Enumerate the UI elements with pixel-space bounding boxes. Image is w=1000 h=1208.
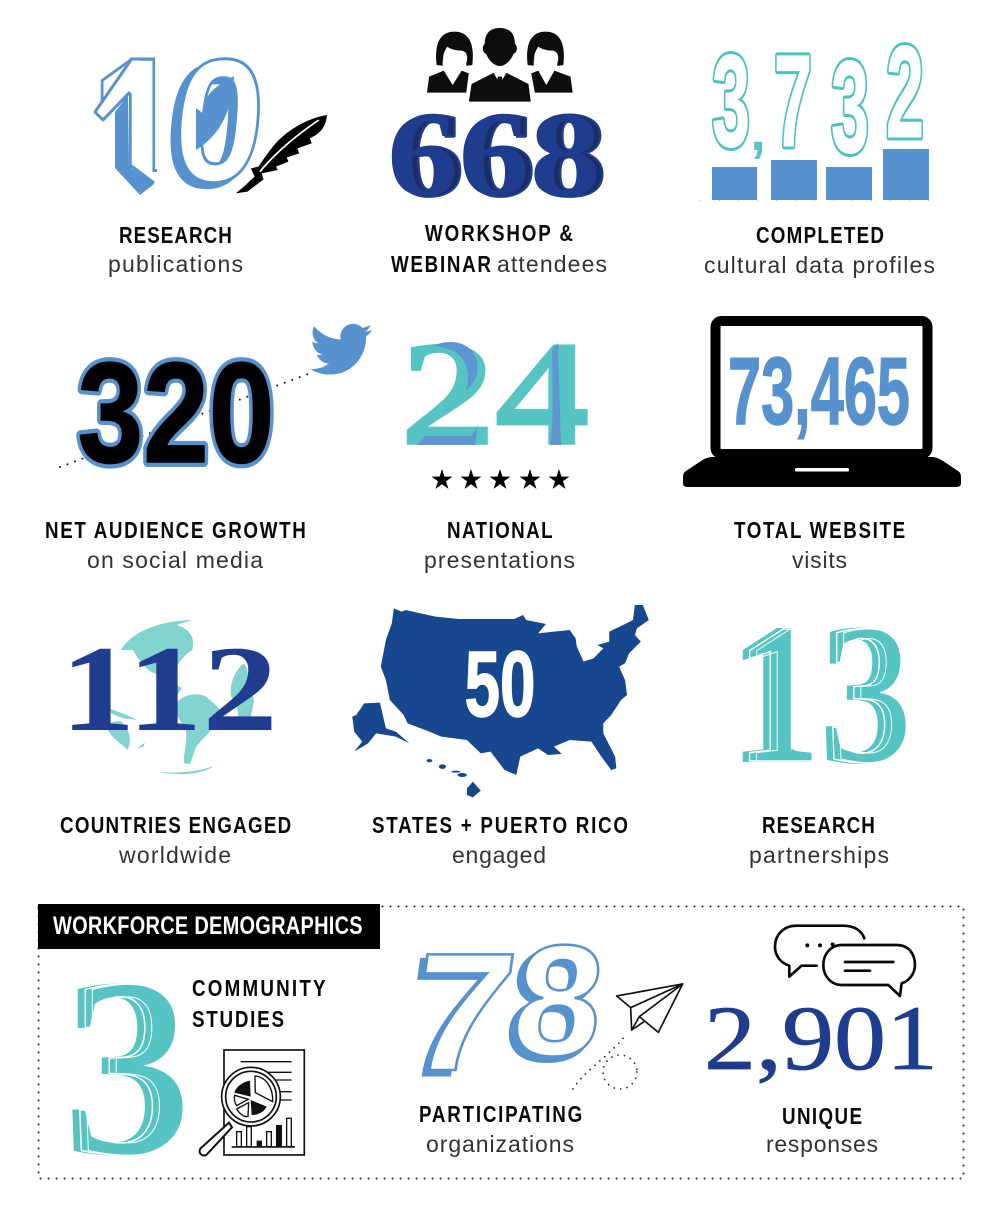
label [749,812,889,868]
number 2,901: 2,901 [704,988,938,1090]
digit one shadow [115,95,154,195]
number 3,732: 3 [712,28,750,175]
number 320: 320 [78,332,274,493]
digit one flag [95,59,155,183]
label [391,220,607,278]
label: organizations [426,1131,574,1157]
label: partnerships [749,842,889,868]
number 3,732: 3 [712,28,750,175]
stat: 78 participating organizations [392,912,683,1157]
label: COMMUNITY [192,975,326,1002]
label: UNIQUE [782,1103,862,1130]
number 3,732: 7 [774,28,812,175]
number 78: 7 [398,919,526,1106]
label [108,222,243,277]
number 3: 3 [70,927,198,1208]
icon: laptop [683,321,961,487]
number 10: 0 [157,28,267,224]
icon: feather quill [236,115,327,193]
stat: 320 net audience growth [45,324,372,573]
dotted flight trail [573,1035,637,1089]
number 3,732: 2 [886,19,924,166]
label: presentations [424,547,575,573]
stat: 112 countries engaged [60,620,291,868]
label: WORKSHOP & [425,220,573,247]
label: worldwide [118,842,231,868]
number 13: 13 [729,584,911,805]
label: publications [108,251,243,277]
number 3,732: 7 [774,28,812,175]
icon: paper plane [617,984,683,1032]
number 3: 3 [77,927,205,1208]
label: COUNTRIES ENGAGED [60,812,291,839]
label: STUDIES [192,1006,284,1033]
icon: three people [427,28,573,103]
label: visits [792,547,847,573]
label: STATES + PUERTO RICO [372,812,628,839]
icon: globe continents [106,620,254,774]
stat: 24 national presentations [400,311,590,573]
number 10: 0 [165,23,273,218]
dotted flight line [60,374,308,467]
panel heading [38,904,380,949]
number 3,732 [712,19,924,181]
label: NATIONAL [447,517,553,544]
five stars [432,469,569,489]
label: on social media [87,547,263,573]
icon: twitter bird [310,324,372,375]
label [192,975,326,1033]
label: COMPLETED [756,222,884,249]
number 320: 320 [78,332,274,493]
number 3,732: 2 [886,19,924,166]
number 78: 7 [392,924,520,1111]
number 3: 3 [63,927,191,1208]
dotted panel border [38,906,964,1178]
number 10: 1 [90,19,186,231]
stat: 2,901 unique responses [704,926,938,1157]
label [704,222,935,278]
label: RESEARCH [762,812,875,839]
label: responses [766,1131,878,1157]
panel: workforce demographics [38,904,964,1208]
panel heading: WORKFORCE DEMOGRAPHICS [53,912,363,940]
stat: 3,732 cultural data profiles [700,19,940,278]
number 78 [392,912,612,1111]
number 112: 112 [60,620,278,757]
stat: 10 research publications [94,57,327,277]
number 10 [100,57,260,190]
label [734,517,905,573]
label [766,1103,878,1157]
label [424,517,575,573]
icon: speech bubbles [775,926,915,996]
stat: 73,465 website visits [683,321,961,573]
icon: USA map [352,605,649,797]
label: TOTAL WEBSITE [734,517,905,544]
number 13: 13 [735,584,917,805]
number 3,732: 3 [831,34,869,181]
bar chart [700,149,940,200]
label: NET AUDIENCE GROWTH [45,517,306,544]
stat: 668 workshop attendees [387,28,607,278]
label [419,1101,582,1157]
icon: zero inner flame [196,76,234,150]
stat: 3 community studies [63,927,326,1208]
number 78: 8 [499,917,607,1094]
number 668: 668 [393,88,607,221]
comma: , [750,99,766,162]
number 3,732: 3 [831,34,869,181]
label [60,812,291,868]
number 78: 8 [506,912,612,1089]
label: cultural data profiles [704,252,935,278]
stat: 50 states + Puerto Rico [352,605,649,868]
label: attendees [497,251,607,277]
label: engaged [452,842,546,868]
number highlights [417,342,561,445]
icon: report with magnifier [200,1050,304,1156]
number 13: 13 [742,584,924,805]
label: PARTICIPATING [419,1101,582,1128]
number 73,465: 73,465 [728,337,910,444]
number 668: 668 [387,88,601,221]
stat: 13 research partnerships [729,584,924,868]
label [45,517,306,573]
number 24: 24 [400,311,590,477]
number 668: 668 [391,88,605,221]
label [372,812,628,868]
number 50: 50 [465,632,535,736]
label: WEBINAR [391,251,491,278]
label: RESEARCH [119,222,232,249]
